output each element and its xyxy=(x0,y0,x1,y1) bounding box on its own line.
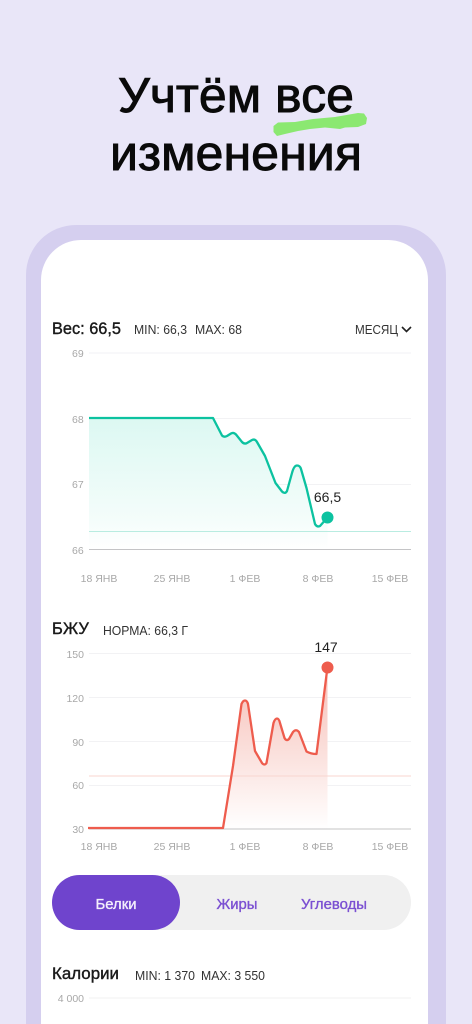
macros chart: 15 ФЕВ xyxy=(372,841,408,853)
title xyxy=(110,69,367,181)
weight chart: 15 ФЕВ xyxy=(372,573,408,585)
calories header: MIN: 1 370 xyxy=(135,969,195,983)
weight header: МЕСЯЦ xyxy=(355,323,399,337)
calories header: MAX: 3 550 xyxy=(201,969,265,983)
weight chart: 1 ФЕВ xyxy=(230,573,260,585)
macros chart: 120 xyxy=(66,693,84,705)
weight area fill xyxy=(89,418,328,549)
macros header xyxy=(52,620,188,638)
weight end point xyxy=(322,512,334,524)
macro toggle xyxy=(52,875,411,930)
macros chart: 25 ЯНВ xyxy=(154,841,190,853)
macros chart: 60 xyxy=(72,780,84,792)
weight chart: 68 xyxy=(72,414,84,426)
calories header: Калории xyxy=(52,965,119,983)
macro toggle: Углеводы xyxy=(301,897,367,913)
macros header: НОРМА: 66,3 Г xyxy=(103,624,188,638)
calories header xyxy=(52,965,265,983)
macros end point xyxy=(322,662,334,674)
macros chart: 90 xyxy=(72,737,84,749)
weight header xyxy=(52,320,411,338)
macros chart: 8 ФЕВ xyxy=(303,841,333,853)
calories chart: 4 000 xyxy=(58,993,84,1005)
macros area fill xyxy=(223,667,328,829)
weight chart: 69 xyxy=(72,348,84,360)
title: изменения xyxy=(110,127,362,181)
macro toggle: Жиры xyxy=(216,897,258,913)
weight chart: 66 xyxy=(72,545,84,557)
title: Учтём все xyxy=(118,69,354,123)
weight chart: 66,5 xyxy=(314,489,341,505)
phone frame xyxy=(26,225,446,1024)
macros chart: 150 xyxy=(66,649,84,661)
weight line xyxy=(89,418,328,526)
icon: chevron xyxy=(402,327,411,332)
weight header: MIN: 66,3 xyxy=(134,323,187,337)
macros line xyxy=(88,667,328,828)
weight chart: 25 ЯНВ xyxy=(154,573,190,585)
weight header: MAX: 68 xyxy=(195,323,242,337)
phone screen xyxy=(41,240,428,1024)
macro toggle: Белки xyxy=(96,897,136,913)
macros chart: 147 xyxy=(314,639,338,655)
macros chart xyxy=(66,639,411,853)
macros chart: 18 ЯНВ xyxy=(81,841,117,853)
weight chart: 18 ЯНВ xyxy=(81,573,117,585)
weight chart: 67 xyxy=(72,479,84,491)
weight chart xyxy=(72,348,411,585)
icon: green highlighter stroke xyxy=(274,113,367,136)
macros chart: 1 ФЕВ xyxy=(230,841,260,853)
macros chart: 30 xyxy=(72,824,84,836)
weight header: Вес: 66,5 xyxy=(52,320,121,338)
macros header: БЖУ xyxy=(52,620,89,638)
weight chart: 8 ФЕВ xyxy=(303,573,333,585)
